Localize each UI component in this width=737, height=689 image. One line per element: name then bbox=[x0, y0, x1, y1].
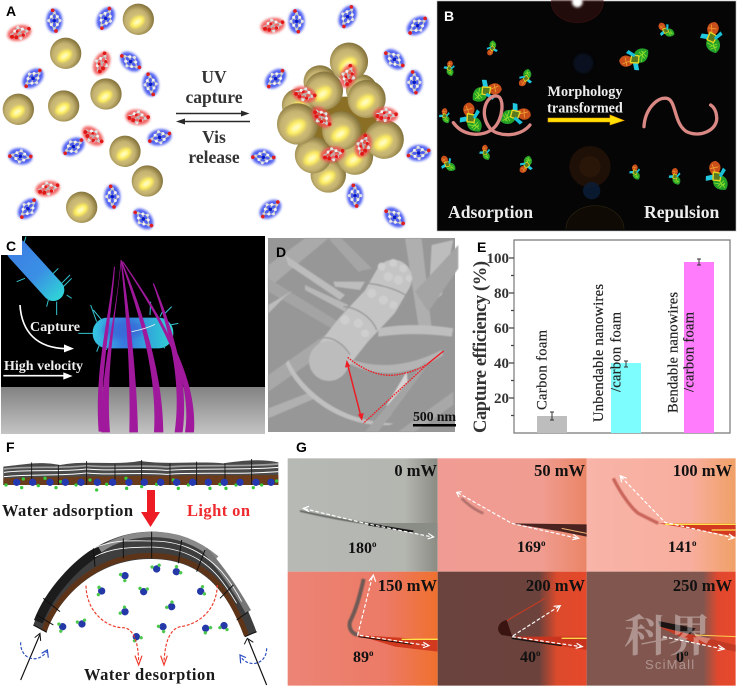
desorbed water molecules bbox=[56, 562, 230, 644]
panel label D: D bbox=[276, 244, 286, 260]
gold nanoparticle cluster with captured molecules bbox=[277, 43, 404, 193]
y axis tick labels: 40 bbox=[494, 356, 509, 372]
bar labels: Unbendable nanowires bbox=[591, 284, 607, 422]
Vis release label: Vis bbox=[202, 127, 226, 147]
yellow arrow bbox=[548, 115, 624, 125]
looped ribbon bbox=[453, 96, 530, 135]
samples and tweezers bbox=[300, 478, 736, 652]
angle labels: o bbox=[684, 648, 689, 658]
bent film bbox=[33, 532, 257, 637]
bar labels bbox=[534, 284, 698, 422]
power labels: 50 mW bbox=[534, 461, 585, 480]
panel F: water adsorption and desorption actuator bbox=[2, 439, 278, 685]
black push arrows bbox=[21, 633, 267, 685]
panel A: gold nanoparticle capture and release bbox=[3, 2, 432, 233]
bar labels: Bendable nanowires bbox=[666, 292, 682, 413]
bars bbox=[537, 262, 714, 433]
axes and ticks bbox=[509, 240, 730, 433]
red dashed flow arrows bbox=[86, 585, 217, 665]
angle labels: 169 bbox=[517, 539, 541, 556]
power labels bbox=[378, 461, 732, 595]
proteins bbox=[438, 19, 731, 191]
angle labels: o bbox=[536, 648, 541, 658]
reversible arrows bbox=[176, 110, 250, 124]
panel label A: A bbox=[6, 3, 16, 19]
angle labels bbox=[348, 538, 697, 666]
capture curved arrow bbox=[20, 305, 74, 352]
angle labels: 0 bbox=[676, 649, 684, 666]
capture label: Capture bbox=[30, 320, 80, 335]
nanowires bbox=[98, 260, 194, 432]
high velocity arrow bbox=[3, 372, 73, 380]
angle labels: 40 bbox=[520, 649, 536, 666]
red down arrow bbox=[141, 490, 160, 527]
adsorption label: Adsorption bbox=[448, 202, 533, 222]
ground bbox=[1, 387, 265, 434]
open ribbon bbox=[644, 98, 717, 134]
panel G: photo-actuated bending at rising power bbox=[288, 439, 736, 686]
angle labels: 89 bbox=[353, 649, 369, 666]
photo tiles bbox=[288, 458, 736, 686]
y axis tick labels bbox=[486, 251, 509, 407]
incoming bacterium bbox=[17, 237, 155, 332]
y axis tick labels: 100 bbox=[486, 251, 509, 267]
bar labels: /carbon foam bbox=[608, 311, 624, 392]
adsorbed water molecules bbox=[4, 477, 278, 492]
dashed white angle arrows bbox=[303, 476, 734, 651]
panel label G: G bbox=[296, 439, 307, 455]
lens flare bbox=[551, 0, 624, 229]
angle labels: o bbox=[369, 648, 374, 658]
red molecules, free bbox=[5, 16, 286, 198]
morphology transformed label: Morphology bbox=[548, 84, 622, 100]
angle labels: o bbox=[541, 538, 546, 548]
morphology transformed label: transformed bbox=[547, 100, 623, 116]
Vis release label: release bbox=[188, 147, 240, 167]
panel label B: B bbox=[444, 8, 454, 24]
blue molecules bbox=[7, 2, 432, 233]
panel E: capture efficiency bar chart bbox=[471, 239, 730, 433]
power labels: 150 mW bbox=[378, 576, 437, 595]
panel B: protein adsorption and repulsion bbox=[437, 0, 736, 231]
water adsorption label: Water adsorption bbox=[2, 501, 133, 520]
panel D: SEM micrograph bbox=[268, 238, 458, 432]
panel label F: F bbox=[6, 439, 15, 455]
captured bacterium bbox=[78, 302, 178, 352]
panel C: bacteria capture by bendable nanowires bbox=[1, 236, 265, 434]
angle labels: o bbox=[692, 538, 697, 548]
y axis tick labels: 60 bbox=[494, 321, 509, 337]
free gold spheres bbox=[3, 4, 163, 223]
nanowire blades bbox=[268, 238, 458, 432]
y axis tick labels: 20 bbox=[494, 391, 509, 407]
scale bar: 500 nm bbox=[413, 410, 456, 425]
power labels: 250 mW bbox=[673, 576, 732, 595]
y axis tick labels: 80 bbox=[494, 286, 509, 302]
watermark: SciMall bbox=[645, 657, 695, 672]
power labels: 0 mW bbox=[394, 461, 437, 480]
power labels: 200 mW bbox=[526, 576, 585, 595]
angle labels: o bbox=[372, 539, 377, 549]
red annotations: bending angle bbox=[345, 351, 444, 423]
water desorption label: Water desorption bbox=[84, 665, 215, 684]
panel label C bbox=[1, 236, 22, 255]
bar labels: /carbon foam bbox=[682, 311, 698, 392]
UV capture label: capture bbox=[185, 87, 243, 107]
y axis title: Capture efficiency (%) bbox=[471, 261, 491, 433]
angle labels: 180 bbox=[348, 540, 372, 557]
bar labels: Carbon foam bbox=[534, 329, 550, 410]
power labels: 100 mW bbox=[673, 461, 732, 480]
error bars bbox=[550, 259, 701, 420]
repulsion label: Repulsion bbox=[644, 202, 720, 222]
bacterium on nanowires bbox=[309, 259, 412, 381]
flat film bbox=[3, 459, 278, 485]
watermark: 科界 bbox=[624, 612, 712, 661]
panel label C: C bbox=[6, 238, 16, 254]
light on label: Light on bbox=[187, 501, 250, 520]
panel label E: E bbox=[477, 239, 486, 255]
blue rotation arrows bbox=[21, 642, 267, 664]
high velocity label: High velocity bbox=[4, 359, 83, 374]
angle labels: 141 bbox=[668, 539, 692, 556]
UV capture label: UV bbox=[201, 67, 227, 87]
